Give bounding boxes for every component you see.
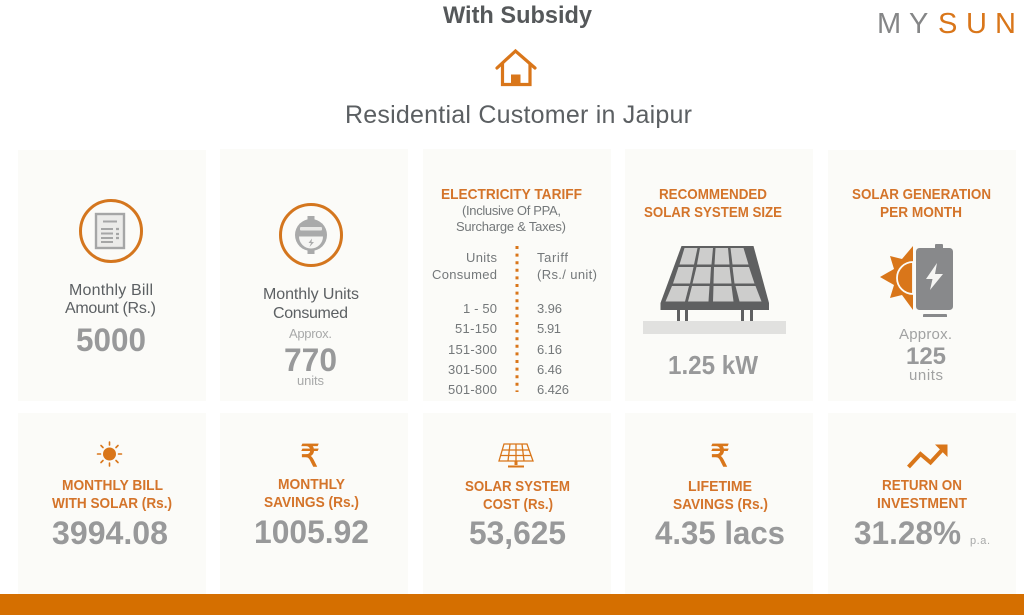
footer bar xyxy=(0,594,1024,615)
panel: monthly bill with solar xyxy=(18,413,206,594)
label: SAVINGS (Rs.) xyxy=(673,496,768,513)
icon: sun xyxy=(98,442,122,466)
icon: small solar panel xyxy=(499,444,533,466)
heading: PER MONTH xyxy=(880,204,962,221)
icon: sun and battery xyxy=(880,244,953,317)
logo xyxy=(877,8,1016,40)
units column: 1 - 50 xyxy=(463,301,497,316)
value: 5000 xyxy=(76,322,146,358)
label: MONTHLY BILL xyxy=(62,477,163,494)
panel: electricity tariff xyxy=(423,149,611,401)
label: SAVINGS (Rs.) xyxy=(264,494,359,511)
icon: solar panel xyxy=(643,246,786,334)
heading: SOLAR GENERATION xyxy=(852,186,991,203)
panel: return on investment xyxy=(828,413,1016,594)
units column: 501-800 xyxy=(448,382,497,397)
label: INVESTMENT xyxy=(877,495,967,512)
label xyxy=(52,477,172,512)
icon: house xyxy=(497,51,535,84)
title: With Subsidy xyxy=(443,2,593,29)
table headers: Tariff xyxy=(537,250,568,265)
value: 4.35 lacs xyxy=(655,515,785,551)
panel: monthly savings xyxy=(220,413,408,594)
value: 3994.08 xyxy=(52,515,168,551)
label xyxy=(65,282,156,317)
approx: Approx. xyxy=(289,326,332,341)
label: Monthly Bill xyxy=(69,282,153,299)
label: Amount (Rs.) xyxy=(65,300,156,317)
label: RETURN ON xyxy=(882,477,962,494)
label: Monthly Units xyxy=(263,286,359,303)
label xyxy=(264,476,359,511)
approx: Approx. xyxy=(899,326,952,343)
heading xyxy=(852,186,991,221)
label: WITH SOLAR (Rs.) xyxy=(52,495,172,512)
units column xyxy=(448,301,497,397)
label: LIFETIME xyxy=(688,478,752,495)
label: SOLAR SYSTEM xyxy=(465,478,570,495)
units: units xyxy=(909,367,943,384)
label xyxy=(465,478,570,513)
panel: solar generation per month xyxy=(828,150,1016,401)
logo: SUN xyxy=(938,8,1016,40)
panel: monthly bill amount xyxy=(18,150,206,401)
value: 770 xyxy=(284,342,337,378)
table headers: Consumed xyxy=(432,267,497,282)
label: COST (Rs.) xyxy=(483,496,553,513)
tariff column: 6.46 xyxy=(537,362,562,377)
heading: RECOMMENDED xyxy=(659,186,767,203)
units column: 151-300 xyxy=(448,342,497,357)
icon: rupee: ₹ xyxy=(710,438,730,474)
value: 53,625 xyxy=(469,515,566,551)
value: 1005.92 xyxy=(254,514,369,550)
value: 31.28% xyxy=(854,515,961,551)
tariff column: 3.96 xyxy=(537,301,562,316)
label: Consumed xyxy=(273,305,348,322)
per annum note: p.a. xyxy=(970,535,990,547)
icon: rupee: ₹ xyxy=(300,438,320,474)
panel: recommended solar system size xyxy=(625,149,813,401)
label xyxy=(877,477,967,512)
panel: lifetime savings xyxy=(625,413,813,594)
heading: ELECTRICITY TARIFF xyxy=(441,186,582,203)
note: (Inclusive Of PPA, xyxy=(462,203,561,218)
note: Surcharge & Taxes) xyxy=(456,219,566,234)
table headers xyxy=(432,250,597,282)
icon: bill xyxy=(80,200,142,262)
panel: solar system cost xyxy=(423,413,611,594)
icon: trend arrow xyxy=(908,444,948,467)
heading: SOLAR SYSTEM SIZE xyxy=(644,204,782,221)
subtitle: Residential Customer in Jaipur xyxy=(345,101,692,129)
units: units xyxy=(297,373,324,388)
units column: 301-500 xyxy=(448,362,497,377)
label xyxy=(263,286,359,322)
logo: MY xyxy=(877,8,928,40)
tariff column: 6.16 xyxy=(537,342,562,357)
tariff column xyxy=(537,301,569,397)
heading xyxy=(644,186,782,221)
tariff column: 5.91 xyxy=(537,321,561,336)
table headers: Units xyxy=(466,250,498,265)
panel: monthly units consumed xyxy=(220,149,408,401)
tariff column: 6.426 xyxy=(537,382,569,397)
dotted divider xyxy=(516,246,518,392)
note xyxy=(456,203,566,234)
value: 125 xyxy=(906,343,946,370)
label: MONTHLY xyxy=(278,476,345,493)
table headers: (Rs./ unit) xyxy=(537,267,597,282)
icon: meter xyxy=(280,204,342,266)
units column: 51-150 xyxy=(455,321,497,336)
label xyxy=(673,478,768,513)
value: 1.25 kW xyxy=(668,350,758,380)
